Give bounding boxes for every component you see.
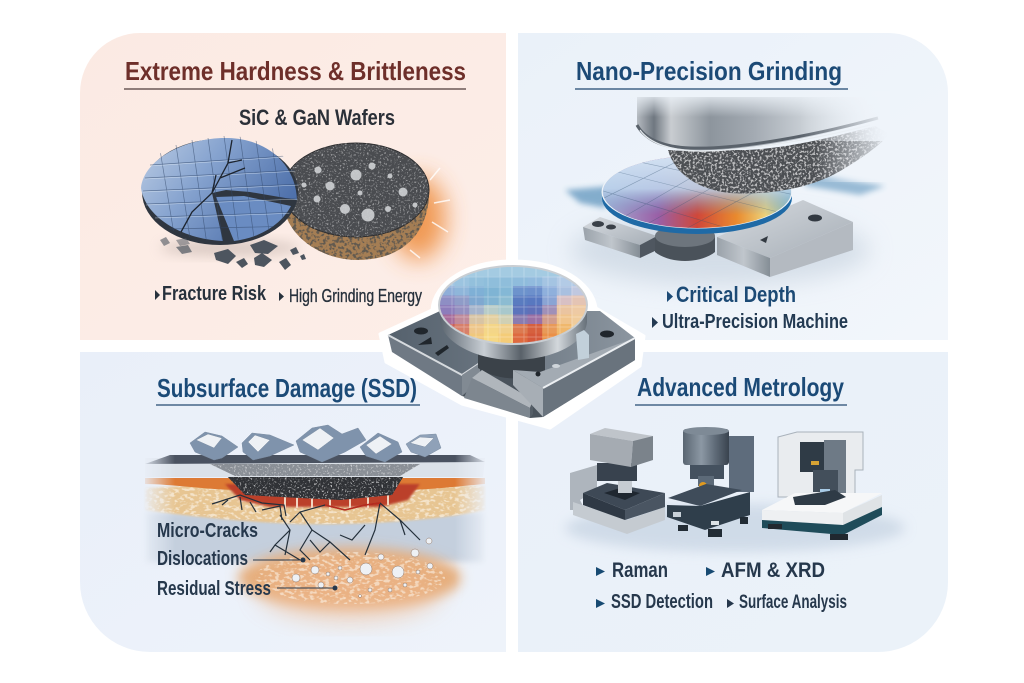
heading: extreme hardness: Extreme Hardness & Brittleness [125, 56, 466, 86]
bullet: ssd detection: SSD Detection [611, 591, 713, 613]
heading: subsurface damage: Subsurface Damage (SSD) [157, 373, 417, 403]
layer: sand damaged zone [145, 483, 485, 524]
bullet: raman [596, 559, 668, 582]
icon: stress pores [292, 538, 433, 598]
center post [478, 345, 545, 378]
bullet: fracture risk: Fracture Risk [162, 283, 267, 305]
holes [414, 328, 428, 334]
chuck underlayer [392, 335, 635, 418]
bullet: raman: Raman [612, 559, 668, 582]
layer: red heat zone [225, 484, 420, 507]
bullet: ultra-precision machine: Ultra-Precision Machine [662, 311, 848, 333]
layer: dark grains [228, 477, 404, 500]
panel: advanced metrology [518, 352, 948, 652]
clip peg [576, 330, 589, 360]
left block [388, 311, 635, 388]
panel: nano-precision grinding [518, 33, 948, 340]
label: micro-cracks: Micro-Cracks [157, 520, 258, 542]
bullet: high grinding energy: High Grinding Energy [289, 286, 422, 306]
icon: wafer fragments [160, 237, 306, 270]
icon: raman instrument [570, 428, 665, 534]
soft shadow beneath wafers [160, 240, 300, 256]
label: residual stress: Residual Stress [157, 578, 271, 600]
icon: abrasive grinding wheel [668, 120, 895, 193]
bullet: afm and xrd: AFM & XRD [721, 559, 825, 582]
panel background: light blue [518, 352, 948, 652]
icon: afm instrument [667, 427, 754, 537]
bullet: surface analysis: Surface Analysis [739, 592, 847, 613]
panel: subsurface damage [80, 352, 506, 652]
red zone streaks [284, 495, 389, 510]
panel background: pale blue [518, 33, 948, 340]
chuck body [388, 311, 635, 418]
icon: rainbow wafer [602, 158, 792, 234]
icon: cracked SiC wafer [141, 136, 300, 245]
bullet: ssd detection [596, 591, 713, 613]
icon: rough GaN wafer [283, 143, 429, 260]
chart: material cross section [145, 455, 485, 620]
wafer surface [438, 265, 588, 345]
layer: lower stress zone [238, 548, 462, 620]
orange glow behind rough wafer [390, 168, 450, 260]
layer: bulk [145, 512, 485, 562]
tongue [472, 370, 533, 408]
bullet: surface analysis [727, 592, 847, 613]
soft floor rays [565, 172, 885, 286]
layer: top slab [145, 455, 485, 477]
subheading: wafers: SiC & GaN Wafers [239, 105, 395, 130]
icon: central wafer on chuck [380, 261, 644, 428]
wafer stack rim [440, 305, 587, 360]
panel background: peach [80, 33, 506, 340]
heading: advanced metrology: Advanced Metrology [637, 372, 844, 402]
floor reflection [565, 504, 905, 552]
label: dislocations: Dislocations [157, 548, 248, 570]
white halo [380, 261, 644, 428]
right block [513, 338, 635, 388]
icon: heat crack highlight [325, 503, 380, 510]
icon: spindle [630, 91, 890, 151]
heading: nano-precision: Nano-Precision Grinding [576, 56, 842, 86]
icon: cracks [212, 495, 420, 560]
icon: chuck base [583, 200, 853, 277]
icon: abrasive rocks [190, 425, 441, 462]
bullet: critical depth: Critical Depth [676, 282, 796, 307]
panel: extreme hardness and brittleness [80, 33, 506, 340]
panel background: light blue [80, 352, 506, 652]
icon: xrd instrument [762, 432, 882, 540]
layer: orange band [145, 478, 485, 490]
